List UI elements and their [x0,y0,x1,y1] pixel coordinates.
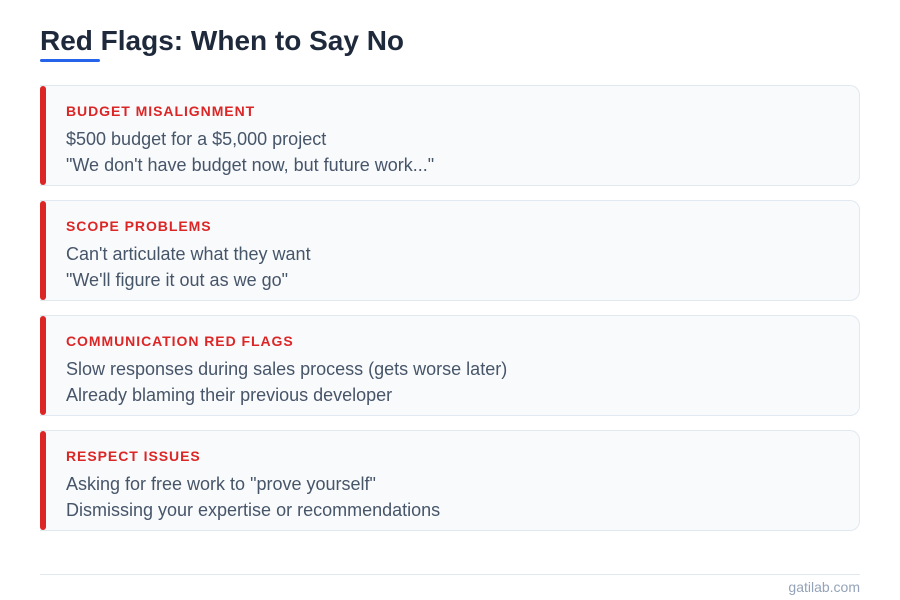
line 1: Asking for free work to "prove yourself" [66,474,376,494]
label: COMMUNICATION RED FLAGS [66,333,294,349]
line 2: "We don't have budget now, but future work..." [66,155,434,175]
line 1: Slow responses during sales process (gets worse later) [66,359,507,379]
label: BUDGET MISALIGNMENT [66,103,255,119]
line 2: Dismissing your expertise or recommendations [66,500,440,520]
footer: site: gatilab.com [788,579,860,595]
label: SCOPE PROBLEMS [66,218,212,234]
line 1: $500 budget for a $5,000 project [66,129,326,149]
card: communication red flags [40,315,860,416]
title underline [40,59,100,62]
line 1: Can't articulate what they want [66,244,311,264]
card: scope problems [40,200,860,301]
line 2: Already blaming their previous developer [66,385,392,405]
title: Red Flags: When to Say No [40,25,404,56]
line 2: "We'll figure it out as we go" [66,270,288,290]
card: respect issues [40,430,860,531]
card: budget misalignment [40,85,860,186]
label: RESPECT ISSUES [66,448,201,464]
